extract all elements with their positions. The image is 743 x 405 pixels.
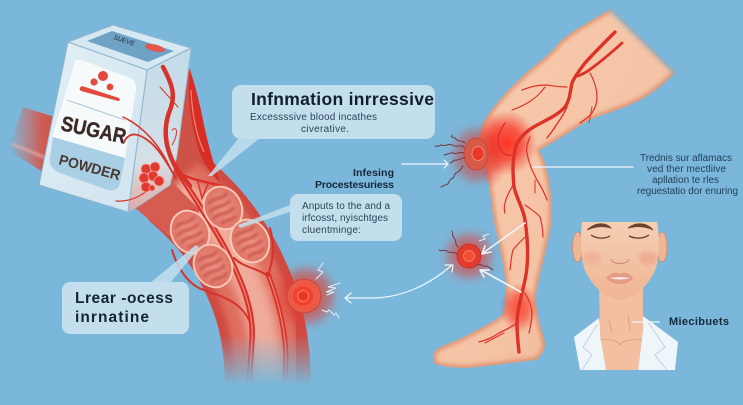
vessels bbox=[169, 162, 288, 380]
leader to right note bbox=[533, 166, 633, 168]
sugar box bbox=[39, 25, 191, 212]
callout: inputs bbox=[238, 194, 402, 241]
closed eyes bbox=[591, 235, 649, 238]
POWDER text: POWDER bbox=[57, 152, 122, 184]
powder label bbox=[50, 137, 125, 190]
callout body bbox=[250, 112, 377, 135]
right note: apllation te rles bbox=[652, 175, 719, 186]
callout: inflammation progressive bbox=[208, 85, 435, 176]
ankle inflammation glow bbox=[500, 283, 538, 333]
white label bbox=[52, 60, 136, 158]
callout body: civerative. bbox=[301, 124, 349, 135]
leg edge shading bbox=[433, 8, 676, 368]
box top bbox=[68, 25, 191, 70]
callout: inputs: Anputs to the and a bbox=[302, 201, 390, 212]
white coat bbox=[574, 316, 678, 370]
heading: infesing processes bbox=[315, 167, 394, 191]
callout heading: Infnmation inrressive bbox=[251, 89, 434, 109]
arrow: artery to lower cell bbox=[482, 223, 525, 254]
callout: inputs: cluentminge: bbox=[302, 225, 361, 236]
artery tube bbox=[135, 67, 286, 390]
label: miecibuets: Miecibuets bbox=[669, 316, 729, 328]
right note: reguestatio dor enuring bbox=[637, 186, 738, 197]
arrow: to knee cell bbox=[402, 160, 448, 168]
curved double arrow between artery cell and lower cell bbox=[345, 265, 453, 303]
callout: linear process bbox=[62, 245, 199, 334]
knee inflammation glow bbox=[477, 110, 537, 176]
right note bbox=[637, 153, 738, 197]
right note: Trednis sur aflamacs bbox=[640, 153, 732, 164]
leader to label bbox=[632, 321, 660, 323]
leg arteries bbox=[479, 32, 622, 352]
callout: linear process: Lrear -ocess bbox=[75, 290, 173, 307]
box front bbox=[39, 42, 147, 212]
artery inflammation cell bbox=[279, 263, 340, 323]
heading: infesing processes: Infesing bbox=[353, 167, 394, 179]
red cell cluster bbox=[139, 162, 164, 192]
arrow: lower artery to lower cell bbox=[480, 270, 521, 292]
vessels over box bbox=[116, 67, 190, 201]
red sugar icon bbox=[80, 71, 120, 101]
neck and chest bbox=[599, 285, 643, 370]
callout body: Excessssive blood incathes bbox=[250, 112, 377, 123]
callout: linear process: inrnatine bbox=[75, 309, 149, 326]
right note: ved ther mectliive bbox=[647, 164, 726, 175]
head bbox=[581, 222, 659, 300]
lower inflammation cell bbox=[439, 231, 493, 278]
knee inflammation cell bbox=[435, 129, 498, 187]
nose bbox=[611, 259, 629, 264]
SUGAR text: SUGAR bbox=[59, 112, 128, 149]
leg bbox=[433, 2, 682, 368]
back tube behind sugar box bbox=[8, 107, 58, 174]
box right side bbox=[128, 48, 191, 212]
woman portrait bbox=[572, 222, 678, 370]
brows bbox=[587, 224, 653, 230]
box top label: SUEVE bbox=[112, 34, 136, 48]
ears bbox=[572, 232, 582, 262]
connector arrows bbox=[345, 160, 633, 303]
heading: infesing processes: Procestesuriess bbox=[315, 179, 394, 191]
thigh fade bbox=[608, 2, 682, 74]
lips bbox=[606, 273, 633, 284]
cells bbox=[170, 186, 270, 288]
callout: inputs: irfcosst, nyischtges bbox=[302, 213, 388, 224]
